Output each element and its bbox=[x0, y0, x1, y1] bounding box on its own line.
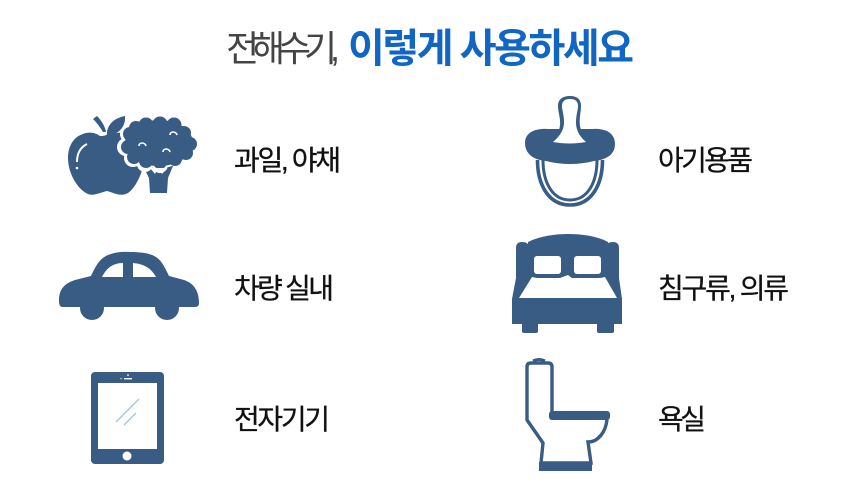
label: baby products: 아기용품 bbox=[658, 145, 753, 176]
icon: toilet bbox=[527, 360, 610, 471]
label: fruit and vegetables: 과일, 야채 bbox=[234, 145, 341, 176]
icon: pacifier bbox=[525, 96, 615, 205]
label: bedding and clothing: 침구류, 의류 bbox=[658, 273, 789, 304]
icon: tablet bbox=[91, 372, 164, 464]
label: car interior: 차량 실내 bbox=[234, 273, 334, 304]
label: electronics: 전자기기 bbox=[234, 404, 330, 435]
icon: apple and broccoli bbox=[68, 116, 197, 195]
title: 이렇게 사용하세요 bbox=[348, 27, 634, 71]
label: bathroom: 욕실 bbox=[658, 404, 706, 435]
icon: bed bbox=[512, 234, 622, 333]
icon: car bbox=[59, 252, 199, 320]
title: 전해수기, bbox=[226, 28, 340, 69]
